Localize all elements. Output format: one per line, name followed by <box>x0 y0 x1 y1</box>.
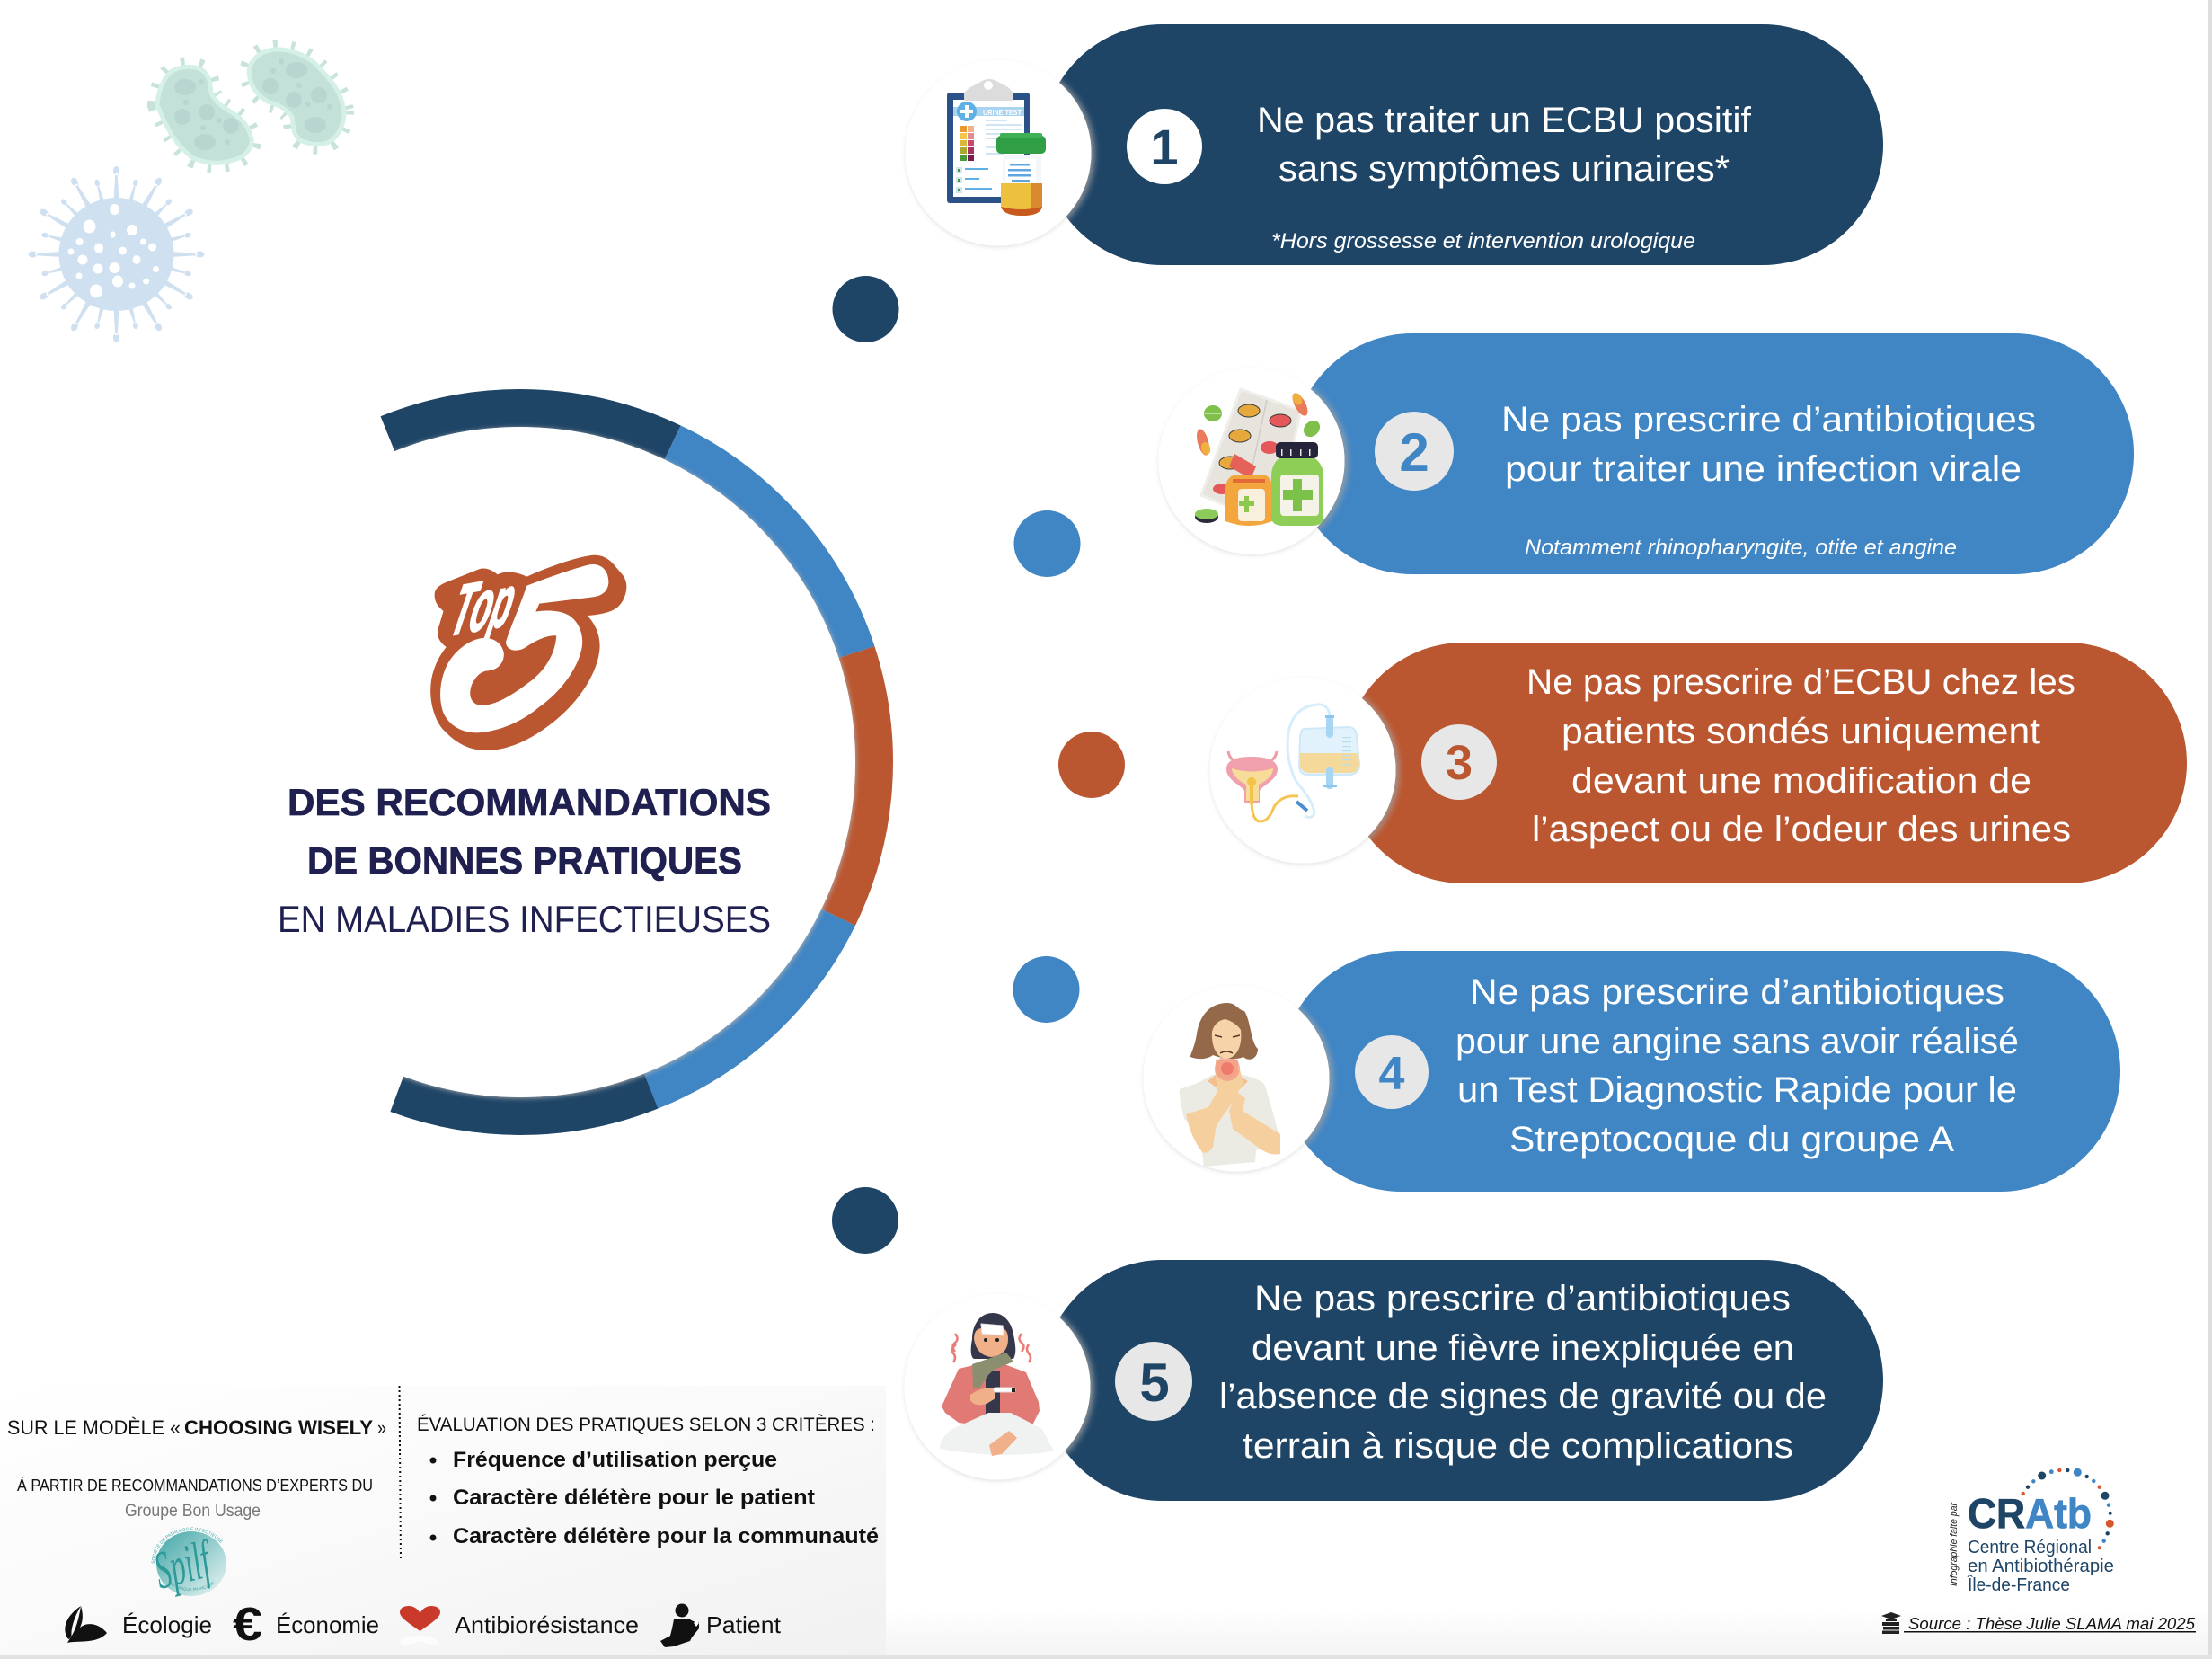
text: recommandation 3: patients sondés uniquement <box>1562 712 2040 751</box>
logo: Top 5: Top <box>444 561 524 652</box>
legend <box>65 1599 782 1651</box>
text: critères <box>417 1415 879 1548</box>
text: recommandation 3: Ne pas prescrire d’ECBU chez les <box>1526 662 2075 702</box>
text: recommandation 4 <box>1455 972 2019 1159</box>
number 4 <box>1355 1035 1429 1109</box>
number 5 <box>1115 1342 1192 1421</box>
legend: Économie <box>276 1611 379 1638</box>
dots arc <box>2022 1468 2114 1549</box>
number 1: 1 <box>1150 119 1179 175</box>
text: critères: Caractère délétère pour le patient <box>453 1486 815 1510</box>
title: DES RECOMMANDATIONS <box>288 781 771 823</box>
panel: recommandation 2 <box>1159 333 2134 574</box>
panel: recommandation 4 <box>1143 951 2120 1192</box>
icon: bladder and urine bag <box>1226 705 1359 821</box>
text: recommandation 1: *Hors grossesse et intervention urologique <box>1271 229 1695 253</box>
number 3 <box>1421 724 1497 800</box>
text: Choosing Wisely <box>7 1416 386 1521</box>
number 1 <box>1127 109 1202 184</box>
panel: recommandation 1 <box>906 24 1883 265</box>
text: recommandation 3: devant une modification de <box>1571 761 2031 801</box>
text: recommandation 1 <box>1257 101 1752 253</box>
text: recommandation 4: pour une angine sans avoir réalisé <box>1455 1022 2019 1061</box>
number 3: 3 <box>1446 736 1473 790</box>
icon: patient <box>660 1603 699 1647</box>
icon: euro: € <box>233 1599 262 1651</box>
text: Choosing Wisely: À PARTIR DE RECOMMANDATIONS D’EXPERTS DU <box>17 1477 373 1495</box>
logo: CRAtb: Infographie faite par <box>1949 1502 1960 1586</box>
icon: virus <box>29 166 205 342</box>
legend: Patient <box>706 1611 782 1638</box>
logo: CRAtb <box>1949 1468 2114 1595</box>
title <box>278 781 771 940</box>
legend: Antibiorésistance <box>455 1611 639 1638</box>
number 4: 4 <box>1379 1048 1405 1100</box>
text: recommandation 5: devant une fièvre inexpliquée en <box>1252 1328 1794 1368</box>
number 2: 2 <box>1399 422 1429 483</box>
logo: CRAtb: Centre Régional <box>1968 1538 2092 1557</box>
text: recommandation 2: pour traiter une infection virale <box>1505 449 2022 489</box>
logo: Spilf: DE LANGUE FRANÇAISE <box>171 1582 215 1591</box>
logo: CRAtb: Île-de-France <box>1967 1575 2070 1595</box>
text: recommandation 3 <box>1526 662 2075 849</box>
text: recommandation 4: Ne pas prescrire d’antibiotiques <box>1470 972 2004 1012</box>
divider <box>399 1386 401 1561</box>
text: recommandation 5: Ne pas prescrire d’antibiotiques <box>1254 1279 1791 1318</box>
text: recommandation 3: l’aspect ou de l’odeur des urines <box>1532 810 2071 849</box>
text: recommandation 5 <box>1219 1279 1827 1466</box>
text: Choosing Wisely: » <box>377 1416 386 1439</box>
panel: recommandation 5 <box>904 1260 1883 1501</box>
central ring <box>381 389 893 1135</box>
text: Choosing Wisely: CHOOSING WISELY <box>184 1416 373 1439</box>
text: recommandation 1: sans symptômes urinaires* <box>1279 149 1730 189</box>
logo: Top 5 <box>430 555 626 750</box>
text: Choosing Wisely: Groupe Bon Usage <box>125 1502 261 1521</box>
title: EN MALADIES INFECTIEUSES <box>278 898 771 940</box>
logo: Spilf: SOCIÉTÉ DE PATHOLOGIE INFECTIEUSE <box>151 1528 223 1564</box>
text: recommandation 4: un Test Diagnostic Rapide pour le <box>1457 1070 2017 1110</box>
logo: CRAtb: CRAtb <box>1968 1490 2092 1537</box>
number 5: 5 <box>1139 1353 1170 1413</box>
panel: recommandation 3 <box>1209 643 2187 883</box>
text: recommandation 2: Notamment rhinopharyngite, otite et angine <box>1525 536 1957 560</box>
text: critères: Fréquence d’utilisation perçue <box>453 1448 777 1472</box>
text: recommandation 5: terrain à risque de complications <box>1243 1426 1793 1466</box>
icon: woman with sore throat <box>1180 1003 1280 1167</box>
connector dots <box>832 276 1125 1254</box>
text: recommandation 2 <box>1501 400 2036 560</box>
text: critères: ÉVALUATION DES PRATIQUES SELON 3 CRITÈRES : <box>417 1415 875 1435</box>
text: recommandation 1: Ne pas traiter un ECBU positif <box>1257 101 1752 140</box>
legend: Écologie <box>122 1611 212 1638</box>
logo: Spilf: Spilf <box>148 1530 219 1601</box>
icon: books <box>1881 1612 1901 1634</box>
panel: méthodologie <box>7 1386 886 1655</box>
icon: urine test clipboard <box>947 79 1046 216</box>
number 2 <box>1375 412 1454 491</box>
icon: urine test clipboard: URINE TEST <box>983 108 1022 117</box>
text: Choosing Wisely: SUR LE MODÈLE « <box>7 1416 181 1439</box>
icon: bacteria <box>157 49 344 163</box>
text: recommandation 4: Streptocoque du groupe A <box>1509 1120 1954 1159</box>
icon: heart <box>400 1606 440 1645</box>
icon: leaf <box>65 1606 107 1643</box>
title: DE BONNES PRATIQUES <box>307 839 742 882</box>
text: recommandation 2: Ne pas prescrire d’antibiotiques <box>1501 400 2036 439</box>
text: recommandation 5: l’absence de signes de gravité ou de <box>1219 1377 1827 1416</box>
logo: CRAtb: en Antibiothérapie <box>1968 1557 2114 1576</box>
icon: person with fever <box>940 1313 1054 1456</box>
icon: medicines <box>1194 389 1323 526</box>
text: critères: Caractère délétère pour la communauté <box>453 1524 879 1548</box>
source: Source : Thèse Julie SLAMA mai 2025 <box>1908 1615 2196 1633</box>
